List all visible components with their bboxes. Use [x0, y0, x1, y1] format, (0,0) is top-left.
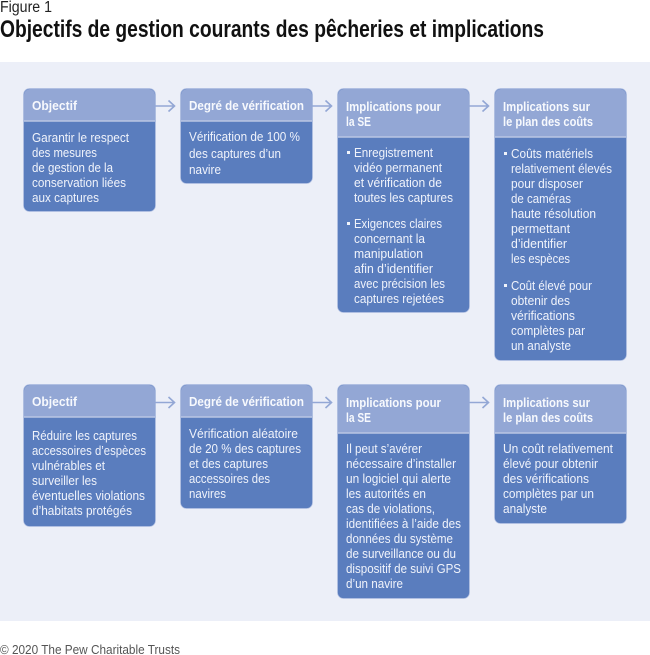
header: Implications sur: [503, 99, 590, 114]
header: [346, 395, 441, 425]
body text: complètes par: [511, 324, 585, 338]
body text: de caméras: [511, 192, 571, 206]
body text: complètes par un: [503, 487, 594, 501]
body text: données du système: [346, 532, 453, 546]
body text: concernant la: [354, 232, 425, 246]
header: Objectif: [32, 394, 78, 409]
body text: et vérification de: [354, 176, 442, 190]
arrow: [312, 100, 332, 112]
body text: [347, 146, 453, 306]
body text: permettant: [511, 222, 570, 236]
row 1: verification box: [180, 88, 312, 184]
body text: vidéo permanent: [354, 161, 442, 175]
body text: surveiller les: [32, 474, 97, 488]
body text: Coût élevé pour: [511, 279, 592, 293]
arrow: [469, 100, 488, 112]
header: Implications pour: [346, 395, 441, 410]
arrow: [469, 397, 488, 408]
body text: [503, 442, 613, 516]
row 1: implications costs box: [494, 88, 626, 360]
body text: Réduire les captures: [32, 429, 137, 443]
body text: avec précision les: [354, 277, 445, 291]
arrow: [155, 397, 174, 408]
body text: Exigences claires: [354, 217, 442, 231]
header: la SE: [346, 114, 371, 129]
body text: relativement élevés: [511, 162, 612, 176]
arrow: [155, 100, 174, 112]
body text: [189, 130, 300, 177]
body text: manipulation: [354, 247, 423, 261]
body text: aux captures: [32, 191, 99, 205]
body text: d’identifier: [511, 237, 567, 251]
body text: Enregistrement: [354, 146, 433, 160]
body text: [32, 429, 146, 518]
body text: Il peut s’avérer: [346, 442, 422, 456]
body text: Garantir le respect: [32, 131, 129, 145]
body text: les espèces: [511, 252, 570, 266]
header: le plan des coûts: [503, 410, 593, 425]
body text: Coûts matériels: [511, 147, 593, 161]
body text: toutes les captures: [354, 191, 453, 205]
body text: et des captures: [189, 457, 268, 471]
body text: accessoires d’espèces: [32, 444, 146, 458]
body text: des mesures: [32, 146, 97, 160]
body text: de 20 % des captures: [189, 442, 301, 456]
body text: accessoires des: [189, 472, 270, 486]
body text: Vérification aléatoire: [189, 427, 298, 441]
header: Degré de vérification: [189, 98, 304, 113]
arrow: [312, 397, 332, 408]
header: [346, 99, 441, 129]
body text: les autorités en: [346, 487, 426, 501]
header: la SE: [346, 410, 371, 425]
body text: haute résolution: [511, 207, 596, 221]
body text: navire: [189, 163, 221, 177]
body text: pour disposer: [511, 177, 583, 191]
body text: conservation liées: [32, 176, 126, 190]
header: Degré de vérification: [189, 394, 304, 409]
body text: [346, 442, 461, 591]
header: Implications sur: [503, 395, 590, 410]
body text: un logiciel qui alerte: [346, 472, 451, 486]
body text: des captures d’un: [189, 147, 281, 161]
body text: d’habitats protégés: [32, 504, 132, 518]
body text: de gestion de la: [32, 161, 113, 175]
body text: captures rejetées: [354, 292, 444, 306]
header: [503, 99, 593, 129]
body text: afin d’identifier: [354, 262, 433, 276]
body text: de surveillance ou du: [346, 547, 456, 561]
body text: vérifications: [511, 309, 575, 323]
body text: cas de violations,: [346, 502, 435, 516]
body text: d’un navire: [346, 577, 403, 591]
body text: analyste: [503, 502, 547, 516]
body text: obtenir des: [511, 294, 570, 308]
body text: navires: [189, 487, 226, 501]
row 1: objective box: [24, 88, 156, 212]
header: Objectif: [32, 98, 78, 113]
body text: [32, 131, 129, 205]
body text: éventuelles violations: [32, 489, 145, 503]
body text: dispositif de suivi GPS: [346, 562, 461, 576]
body text: un analyste: [511, 339, 571, 353]
row 1: implications SE box: [338, 88, 470, 312]
row 2: objective box: [24, 384, 156, 526]
row 2: implications costs box: [494, 384, 626, 524]
body text: élevé pour obtenir: [503, 457, 598, 471]
body text: des vérifications: [503, 472, 589, 486]
body text: nécessaire d’installer: [346, 457, 456, 471]
body text: vulnérables et: [32, 459, 105, 473]
row 2: implications SE box: [338, 384, 470, 598]
body text: [189, 427, 301, 501]
header: Implications pour: [346, 99, 441, 114]
body text: [504, 147, 612, 353]
body text: identifiées à l’aide des: [346, 517, 461, 531]
row 2: verification box: [180, 384, 312, 508]
body text: Un coût relativement: [503, 442, 613, 456]
body text: Vérification de 100 %: [189, 130, 300, 144]
header: [503, 395, 593, 425]
header: le plan des coûts: [503, 114, 593, 129]
